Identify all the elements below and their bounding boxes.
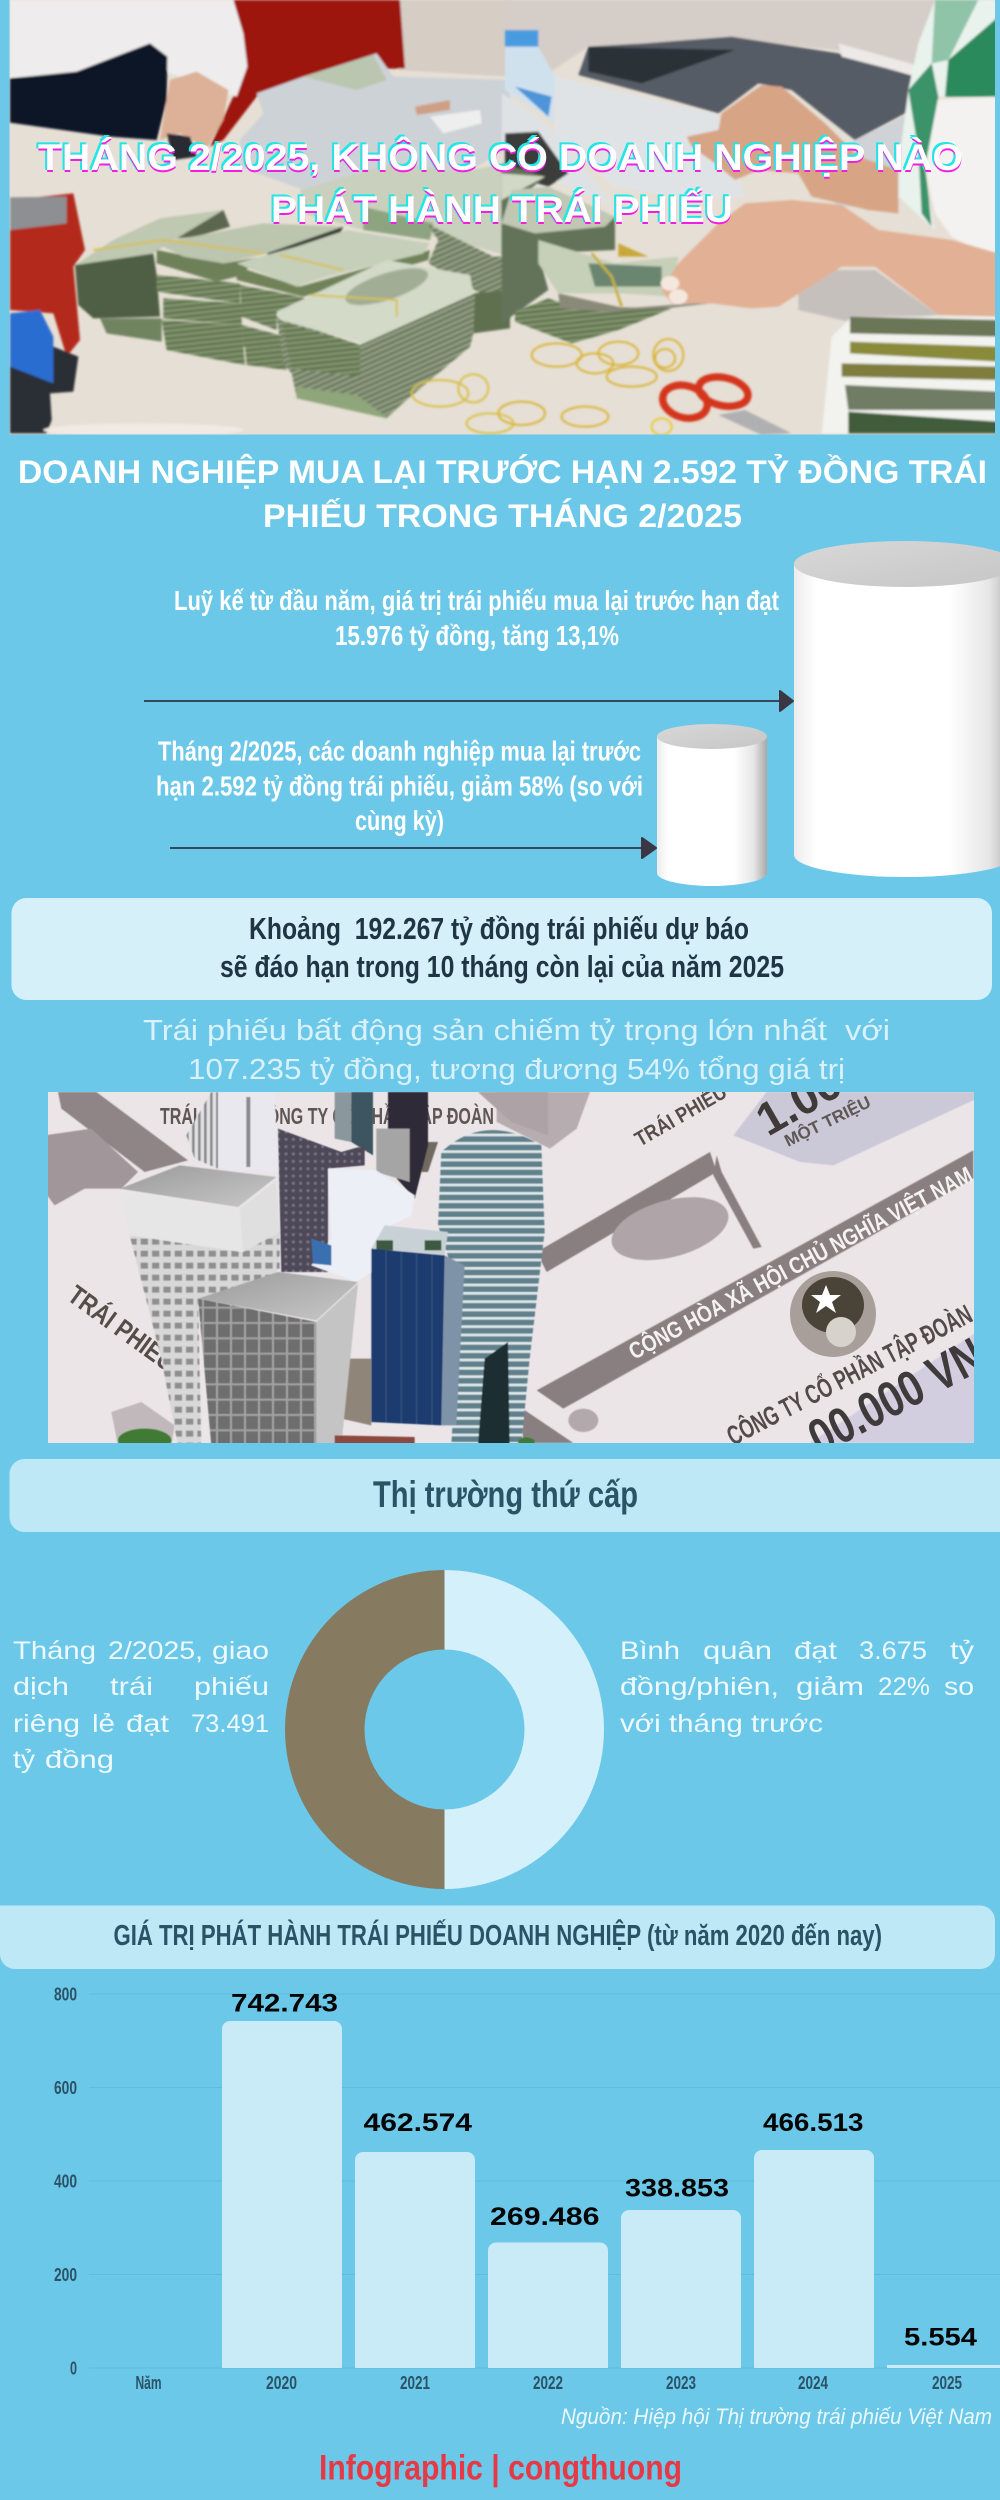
main heading [18,454,987,534]
right donut text: tỷ [950,1637,975,1665]
right donut text: 22% [878,1673,930,1701]
left donut text: phiếu [194,1673,269,1701]
hero title [38,136,963,230]
left half of photo [10,0,513,437]
bars [222,2021,1000,2368]
small white cylinder [657,724,767,886]
right donut text: so [944,1673,974,1701]
bond certificate artwork [497,1092,977,1443]
donut chart [285,1570,604,1889]
section heading: secondary market: Thị trường thứ cấp [373,1474,638,1515]
hands [687,85,898,213]
y axis labels: 0 [70,2358,77,2378]
real estate bonds text: 107.235 tỷ đồng, tương đương 54% tổng giá trị [188,1054,845,1086]
february buyback text: cùng kỳ) [355,805,444,836]
skyscrapers [118,1092,545,1452]
bond certificate lettering: MỘT TRIỆU [781,1093,874,1151]
bond certificate lettering: 1.000 [747,1043,873,1146]
bar value labels: 462.574 [364,2109,472,2137]
callout: bonds maturing: sẽ đáo hạn trong 10 tháng còn lại của năm 2025 [220,949,784,984]
bar chart [54,1984,1000,2393]
right donut text: giảm [796,1673,864,1701]
left donut text: riêng [13,1710,80,1738]
right donut text: quân [703,1637,772,1665]
february buyback text [156,736,643,836]
bond certificate lettering: TRÁI PHIẾU CÔNG TY CỔ PHẦN TẬP ĐOÀN [160,1102,494,1129]
photo: skyscrapers over bond certificates [48,1092,974,1443]
arrow to small cylinder [170,838,656,858]
february buyback text: hạn 2.592 tỷ đồng trái phiếu, giảm 58% (so với [156,770,643,802]
y axis labels [54,1984,77,2378]
right donut text: với tháng trước [620,1710,823,1738]
x axis labels [136,2373,962,2393]
bar value labels: 5.554 [904,2324,977,2352]
y axis labels: 200 [54,2265,77,2285]
left donut text: lẻ [92,1710,115,1738]
right donut text [620,1637,975,1738]
right donut text: 3.675 [859,1637,927,1665]
x axis labels: 2021 [400,2373,430,2393]
bar value labels: 338.853 [625,2174,729,2202]
big white cylinder [794,541,1000,877]
bar value labels: 269.486 [490,2203,600,2231]
left donut text: đồng [45,1746,114,1774]
footer brand: Infographic | congthuong [319,2448,682,2488]
rubber bands [498,339,683,435]
left donut text: 2/2025, [108,1637,203,1665]
section heading: issuance value [0,1906,995,1969]
stacks [75,253,160,318]
white stack [822,317,998,433]
bar value labels: 742.743 [231,1990,338,2018]
real estate bonds text: Trái phiếu bất động sản chiếm tỷ trọng lớn nhất với [143,1015,890,1047]
cumulative buyback text [174,585,779,651]
bond certificate lettering [70,1092,974,1443]
callout: bonds maturing [12,898,992,1000]
scissors [659,373,751,423]
right donut text: đạt [794,1637,837,1665]
bond certificate lettering: TRÁI PHIẾU C [631,1071,746,1151]
bar value labels: 466.513 [763,2109,864,2137]
left donut text: 73.491 [191,1710,269,1738]
left donut text: đạt [126,1710,169,1738]
arrow to big cylinder [144,691,793,711]
bond certificate lettering: TRÁI PHIẾU [62,1279,182,1377]
x axis labels: 2025 [932,2373,962,2393]
x axis labels: 2024 [798,2373,828,2393]
cumulative buyback text: Luỹ kế từ đầu năm, giá trị trái phiếu mua lại trước hạn đạt [174,585,779,616]
y axis labels: 600 [54,2078,77,2098]
stacks right [502,163,615,323]
right donut text: Bình [620,1637,680,1665]
x axis labels: 2020 [266,2373,297,2393]
x axis labels: 2022 [533,2373,563,2393]
main heading: DOANH NGHIỆP MUA LẠI TRƯỚC HẠN 2.592 TỶ ĐỒNG TRÁI [18,454,987,490]
hero title: THÁNG 2/2025, KHÔNG CÓ DOANH NGHIỆP NÀO [38,136,963,178]
left donut text: giao [212,1637,269,1665]
x axis labels: 2023 [666,2373,696,2393]
y axis labels: 400 [54,2172,77,2192]
section heading: secondary market [10,1459,1000,1532]
main heading: PHIẾU TRONG THÁNG 2/2025 [263,498,742,534]
national emblem [790,1271,876,1357]
x axis labels: Năm [136,2373,162,2393]
right half of photo [498,0,998,435]
real estate bonds text [143,1015,890,1086]
left donut text: tỷ [13,1746,36,1774]
cumulative buyback text: 15.976 tỷ đồng, tăng 13,1% [335,620,619,651]
right donut text: đồng/phiên, [620,1673,779,1701]
left donut text [13,1637,269,1774]
callout: bonds maturing: Khoảng 192.267 tỷ đồng trái phiếu dự báo [249,911,749,946]
y axis labels: 800 [54,1984,77,2004]
left donut text: trái [110,1673,153,1701]
bar value labels [231,1990,977,2352]
gridlines [89,1994,1000,2368]
left donut text: dịch [13,1673,69,1701]
hero title: PHÁT HÀNH TRÁI PHIẾU [271,189,733,230]
february buyback text: Tháng 2/2025, các doanh nghiệp mua lại trước [158,736,641,766]
left donut text: Tháng [13,1637,96,1665]
hero photo: counting banknotes [10,0,998,437]
